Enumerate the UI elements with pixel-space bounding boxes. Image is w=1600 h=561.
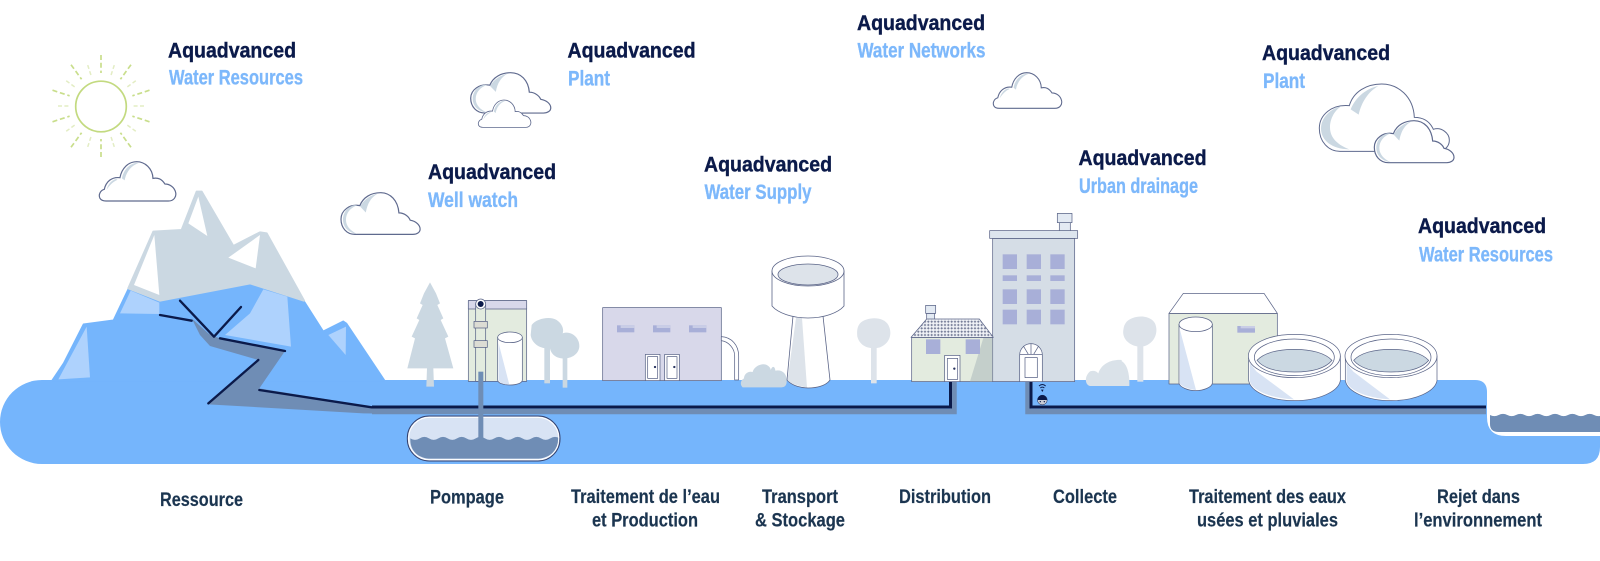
cloud: above mountain <box>99 162 176 201</box>
heading: plant right <box>1262 41 1390 93</box>
building window <box>1237 326 1255 333</box>
outlet pipe <box>721 337 739 380</box>
bush <box>741 364 787 387</box>
label: transport: & Stockage <box>755 510 845 532</box>
plant doors <box>645 354 679 381</box>
underground reservoir <box>407 416 560 461</box>
plant windows <box>617 325 706 332</box>
sensor with wifi <box>1037 384 1047 405</box>
heading: water resources: Aquadvanced <box>168 38 296 62</box>
tree <box>1123 316 1156 382</box>
heading: plant right: Plant <box>1263 69 1305 93</box>
crack shadow <box>192 318 400 414</box>
cloud: well watch <box>341 193 420 234</box>
heading: well watch <box>428 160 556 212</box>
label: pompage: Pompage <box>430 488 504 508</box>
heading: water resources right: Aquadvanced <box>1418 214 1546 238</box>
heading: water supply: Aquadvanced <box>704 152 832 176</box>
heading: well watch: Well watch <box>428 188 518 212</box>
ice facets <box>58 289 346 379</box>
heading: water resources right: Water Resources <box>1419 242 1553 266</box>
tower stem <box>787 316 830 388</box>
building roof cap <box>990 231 1078 238</box>
sun <box>52 55 150 157</box>
pumping station and plant <box>407 282 787 461</box>
well pipe <box>476 304 486 381</box>
heading: water networks <box>857 11 986 62</box>
chimney <box>1057 213 1072 231</box>
heading: well watch: Aquadvanced <box>428 160 556 184</box>
label: rejet: l’environnement <box>1414 510 1543 532</box>
house door <box>945 355 960 382</box>
heading: plant: Aquadvanced <box>568 38 696 62</box>
clouds: plant left <box>471 73 551 127</box>
wastewater treatment <box>1118 293 1600 432</box>
ground band <box>0 380 1600 464</box>
plant building <box>603 308 721 381</box>
cylinder tank <box>498 337 522 385</box>
heading: urban drainage: Aquadvanced <box>1078 146 1206 170</box>
tower cup <box>772 271 844 318</box>
heading: urban drainage: Urban drainage <box>1079 174 1198 198</box>
heading: water networks: Aquadvanced <box>857 11 985 35</box>
heading: plant right: Aquadvanced <box>1262 41 1390 65</box>
cloud: water networks <box>993 73 1062 108</box>
label: distribution: Distribution <box>899 487 991 508</box>
mountain body <box>52 283 385 381</box>
label: traitement des eaux: Traitement des eaux <box>1189 487 1346 508</box>
pine tree <box>407 282 453 387</box>
receiving water <box>1490 414 1600 432</box>
treatment building <box>1169 313 1277 384</box>
underground pipes <box>372 382 1486 412</box>
label: transport <box>755 487 845 532</box>
house body <box>912 337 993 382</box>
heading: urban drainage <box>1078 146 1206 198</box>
well building <box>468 301 527 381</box>
houses <box>857 213 1122 405</box>
basin two <box>1345 334 1437 401</box>
mountain <box>52 192 400 414</box>
house roof <box>911 319 993 337</box>
bush <box>1086 360 1122 386</box>
clouds: plant right <box>1319 84 1454 163</box>
heading: water supply: Water Supply <box>704 180 812 204</box>
heading: water supply <box>704 152 832 204</box>
label: traitement de l'eau: Traitement de l’eau <box>571 487 720 508</box>
label: traitement des eaux: usées et pluviales <box>1197 510 1338 532</box>
label: collecte: Collecte <box>1053 487 1117 508</box>
water tower <box>772 256 844 388</box>
building windows <box>1003 254 1065 324</box>
bush <box>1118 360 1129 386</box>
tree <box>857 318 890 383</box>
heading: plant <box>568 38 696 90</box>
label: rejet <box>1414 487 1543 532</box>
snow facets <box>134 197 260 295</box>
basin one <box>1248 334 1340 401</box>
heading: water resources right <box>1418 214 1553 266</box>
label: traitement des eaux <box>1189 487 1346 532</box>
house windows <box>926 339 980 354</box>
round trees <box>531 318 579 388</box>
pump shaft <box>478 372 483 440</box>
label: traitement de l'eau: et Production <box>592 510 698 532</box>
label: transport: Transport <box>762 487 839 508</box>
tall building <box>993 238 1075 382</box>
label: traitement de l'eau <box>571 487 720 532</box>
label: ressource: Ressource <box>160 490 243 511</box>
tower water <box>778 264 838 285</box>
heading: water resources <box>168 38 303 90</box>
heading: water networks: Water Networks <box>858 38 986 62</box>
house chimney <box>926 305 936 319</box>
mountain snow cap <box>128 192 304 301</box>
heading: plant: Plant <box>568 66 610 90</box>
crack lines <box>160 301 400 407</box>
building door <box>1020 344 1042 382</box>
label: rejet: Rejet dans <box>1437 487 1520 508</box>
cylinder tank <box>1179 324 1212 391</box>
heading: water resources: Water Resources <box>169 66 303 90</box>
